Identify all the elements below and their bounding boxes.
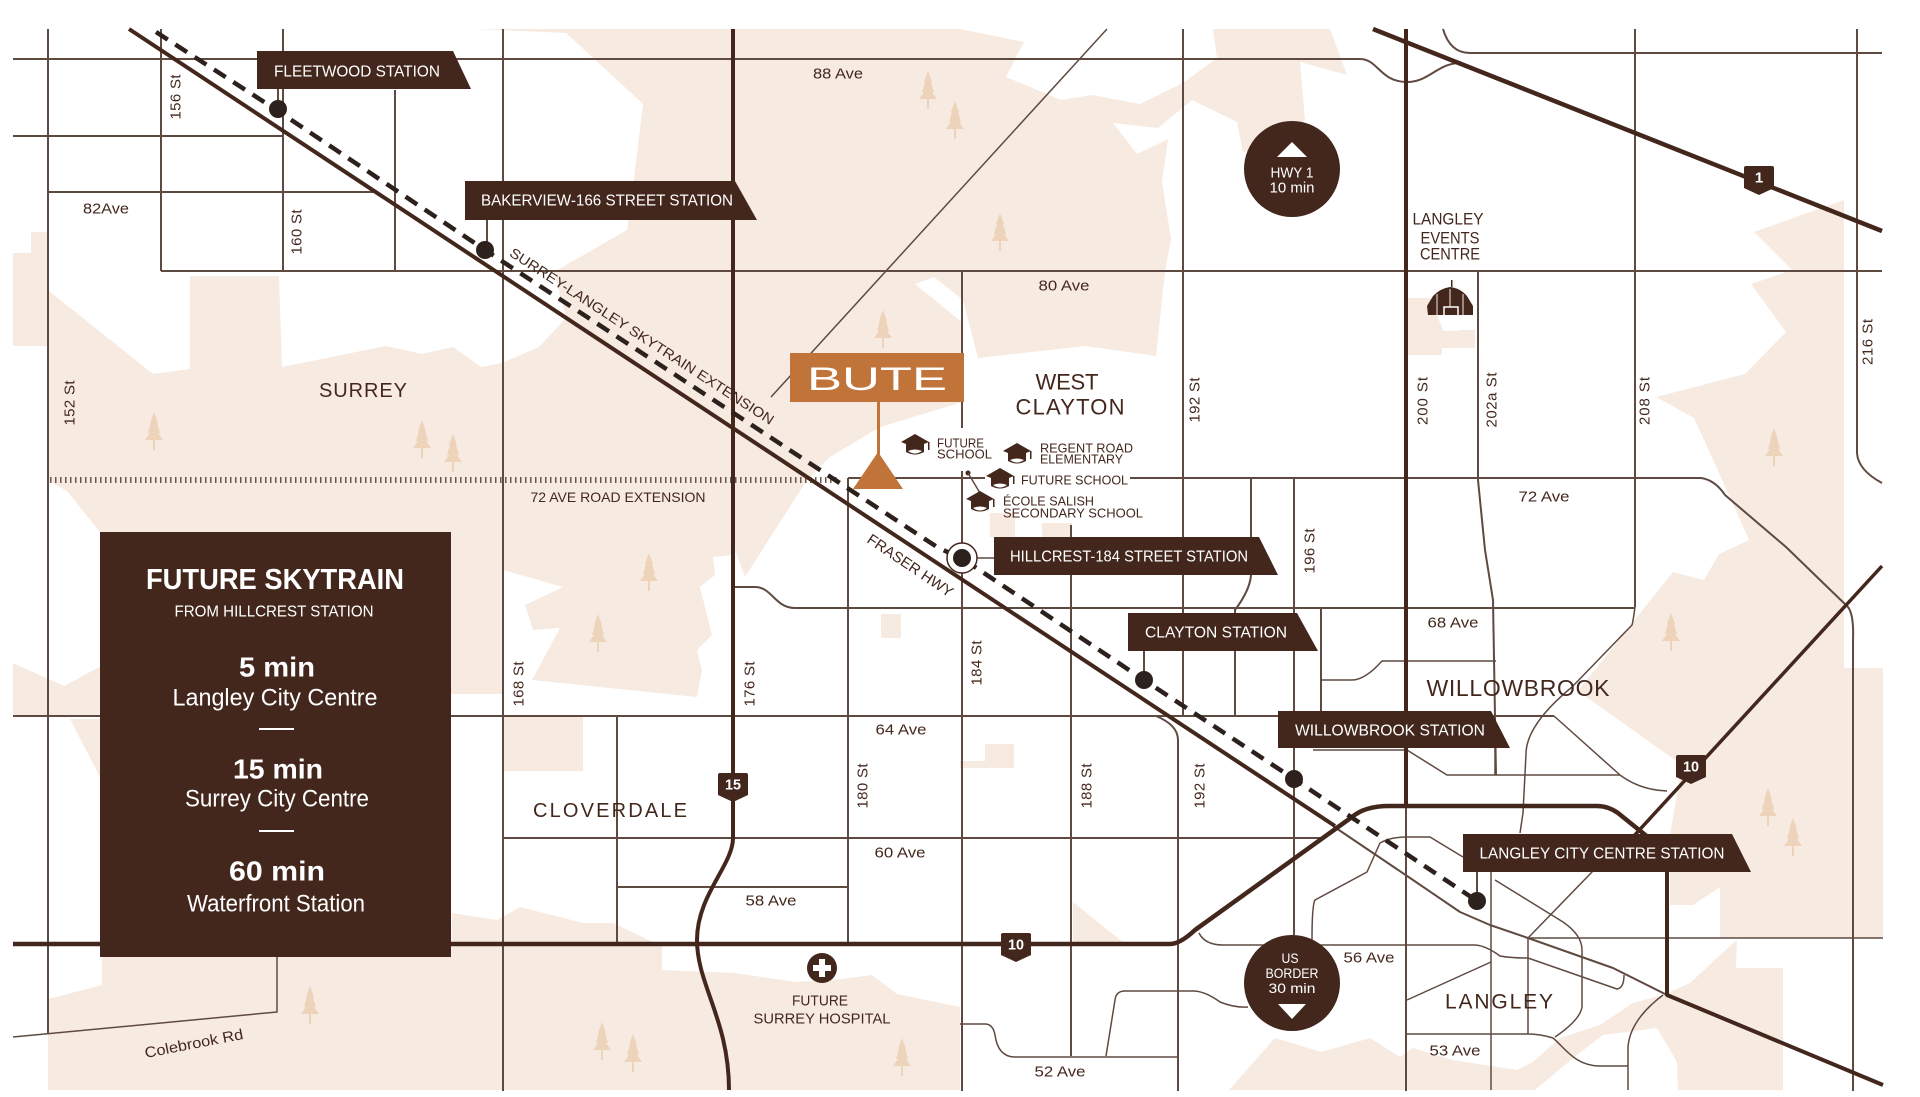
langley events centre: LANGLEY <box>1412 210 1484 228</box>
info panel: future skytrain: Langley City Centre <box>172 684 378 712</box>
callout: us border: BORDER <box>1266 965 1318 981</box>
street labels: 180 St <box>854 763 872 808</box>
street labels: 58 Ave <box>746 892 796 910</box>
langley events centre <box>1412 210 1484 330</box>
street labels: 176 St <box>742 661 758 706</box>
station: langley city centre <box>1463 834 1751 910</box>
street labels: 152 St <box>62 380 78 426</box>
schools: ELEMENTARY <box>1040 452 1123 466</box>
langley events centre: EVENTS <box>1420 228 1480 248</box>
future surrey hospital: FUTURE <box>792 992 848 1010</box>
station: langley city centre: LANGLEY CITY CENTRE STATION <box>1480 846 1724 862</box>
street labels: 60 Ave <box>874 844 926 862</box>
street labels: SURREY-LANGLEY SKYTRAIN EXTENSION <box>507 244 777 428</box>
highway shields: 10 <box>1008 936 1024 954</box>
neighbourhood labels: CLOVERDALE <box>533 800 687 822</box>
street labels: 208 St <box>1636 376 1654 425</box>
street labels: 192 St <box>1192 763 1208 808</box>
street labels: 160 St <box>288 209 306 254</box>
street labels: 64 Ave <box>876 722 926 738</box>
station: hillcrest: HILLCREST-184 STREET STATION <box>1010 548 1248 566</box>
callout: hwy 1: HWY 1 <box>1270 164 1314 182</box>
callout: hwy 1: 10 min <box>1270 180 1314 196</box>
station: bakerview: BAKERVIEW-166 STREET STATION <box>481 192 733 210</box>
street labels: Colebrook Rd <box>143 1026 245 1062</box>
street labels: 168 St <box>510 661 528 706</box>
future surrey hospital <box>754 953 890 1028</box>
street labels: 52 Ave <box>1034 1064 1086 1080</box>
trees <box>145 71 1802 1076</box>
info panel: future skytrain: FUTURE SKYTRAIN <box>146 564 404 596</box>
dotted road: 72 ave extension <box>50 477 840 483</box>
street labels: 188 St <box>1078 763 1096 808</box>
info panel: future skytrain: FROM HILLCREST STATION <box>174 604 374 620</box>
schools: REGENT ROAD <box>1040 440 1133 456</box>
neighbourhood labels: CLAYTON <box>1016 394 1124 420</box>
info panel: future skytrain <box>100 532 451 957</box>
highway shields: 10 <box>1683 758 1699 776</box>
station: willowbrook: WILLOWBROOK STATION <box>1295 722 1485 740</box>
street labels: 202a St <box>1484 372 1500 428</box>
street labels: 184 St <box>968 640 986 686</box>
schools: SCHOOL <box>937 446 992 462</box>
street labels: 80 Ave <box>1038 278 1090 294</box>
street labels: 56 Ave <box>1344 950 1394 966</box>
station: willowbrook <box>1278 711 1510 788</box>
marker: bute <box>790 353 964 489</box>
schools: FUTURE SCHOOL <box>1021 472 1128 488</box>
info panel: future skytrain: Surrey City Centre <box>185 786 369 812</box>
street labels: 82Ave <box>83 200 129 218</box>
street labels: 88 Ave <box>813 66 863 82</box>
future surrey hospital: SURREY HOSPITAL <box>754 1010 890 1028</box>
fraser highway <box>129 29 1335 826</box>
schools <box>901 434 1143 520</box>
schools: ÉCOLE SALISH <box>1003 494 1094 508</box>
street labels: 72 Ave <box>1518 488 1570 506</box>
skytrain extension dashed line <box>156 32 1477 901</box>
station: fleetwood <box>257 51 471 118</box>
street labels: 156 St <box>168 74 184 120</box>
info panel: future skytrain: 15 min <box>233 754 323 784</box>
info panel: future skytrain: Waterfront Station <box>187 890 365 918</box>
neighbourhood labels <box>319 370 1610 1014</box>
neighbourhood labels: LANGLEY <box>1445 990 1553 1014</box>
schools: FUTURE <box>937 436 984 450</box>
langley events centre: CENTRE <box>1420 244 1480 264</box>
street labels: 196 St <box>1302 528 1318 574</box>
neighbourhood labels: WEST <box>1036 370 1098 394</box>
info panel: future skytrain: 5 min <box>239 652 315 682</box>
callout: hwy 1 <box>1244 121 1340 217</box>
street labels: 200 St <box>1414 376 1432 425</box>
street labels: 216 St <box>1860 318 1876 365</box>
neighbourhood labels: SURREY <box>319 380 407 402</box>
callout: us border: US <box>1282 950 1298 966</box>
highway shields: 1 <box>1755 170 1763 186</box>
street labels: FRASER HWY <box>864 531 956 601</box>
station: bakerview <box>465 181 757 259</box>
station: clayton <box>1128 613 1318 689</box>
street labels: 53 Ave <box>1430 1042 1480 1060</box>
station: hillcrest <box>947 537 1278 575</box>
highway shields <box>718 166 1774 962</box>
street labels: 72 AVE ROAD EXTENSION <box>530 489 706 505</box>
neighbourhood labels: WILLOWBROOK <box>1426 675 1610 701</box>
info panel: future skytrain: 60 min <box>229 856 325 886</box>
station: clayton: CLAYTON STATION <box>1145 624 1287 642</box>
schools: SECONDARY SCHOOL <box>1003 506 1143 520</box>
street labels: 192 St <box>1186 377 1204 422</box>
street labels: 68 Ave <box>1428 614 1478 632</box>
highway shields: 15 <box>725 776 741 794</box>
callout: us border <box>1244 935 1340 1031</box>
callout: us border: 30 min <box>1268 980 1316 996</box>
station: fleetwood: FLEETWOOD STATION <box>274 64 440 80</box>
marker: bute: BUTE <box>807 361 947 397</box>
